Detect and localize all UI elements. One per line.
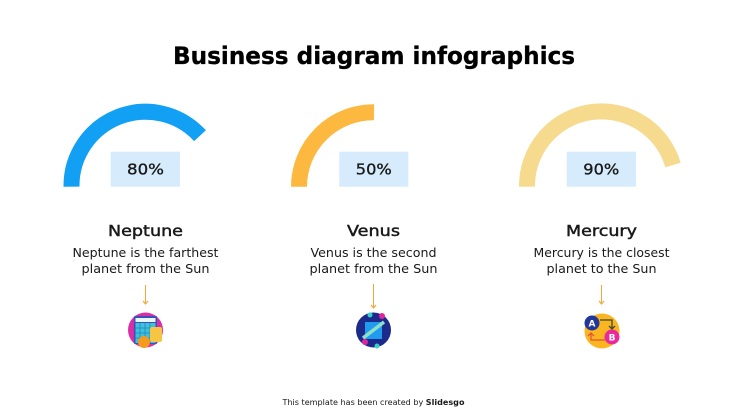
description: Venus (310, 246, 438, 276)
icon: A to B exchange: B (609, 334, 616, 344)
description: Neptune: planet from the Sun (82, 262, 210, 276)
value box: 50%: 50% (356, 160, 392, 178)
heading: Neptune: Neptune (108, 222, 183, 240)
description: Venus: planet from the Sun (310, 262, 438, 276)
description: Venus: Venus is the second (310, 246, 436, 260)
gauge arc: Mercury 90% (527, 111, 673, 187)
description: Neptune (72, 246, 219, 276)
title: Business diagram infographics (173, 42, 575, 70)
heading: Venus: Venus (347, 222, 400, 240)
panel: Neptune (71, 112, 219, 348)
description: Mercury: Mercury is the closest (534, 246, 670, 260)
arrow: Neptune (143, 285, 148, 304)
footer credit: This template has been created by Slidesgo (281, 398, 464, 407)
gauge arc: Venus 50% (299, 112, 374, 187)
value box: 90%: 90% (583, 160, 619, 178)
icon: chain link (356, 312, 391, 348)
icon: A to B exchange: A (589, 320, 596, 330)
value box: 50% (339, 152, 408, 187)
value box: 80% (111, 152, 180, 187)
icon: A to B exchange (584, 314, 620, 348)
gauge arc: Neptune 80% (71, 112, 200, 187)
arrow: Mercury (599, 285, 604, 304)
value box: 90% (567, 152, 636, 187)
icon: calculator and coins (128, 312, 163, 348)
heading: Mercury: Mercury (566, 222, 637, 240)
panel: Venus (299, 112, 438, 348)
description: Mercury: planet to the Sun (546, 262, 656, 276)
arrow: Venus (371, 284, 376, 308)
description: Mercury (534, 246, 670, 276)
panel: Mercury (527, 111, 673, 349)
value box: 80%: 80% (127, 160, 164, 178)
description: Neptune: Neptune is the farthest (72, 246, 219, 260)
